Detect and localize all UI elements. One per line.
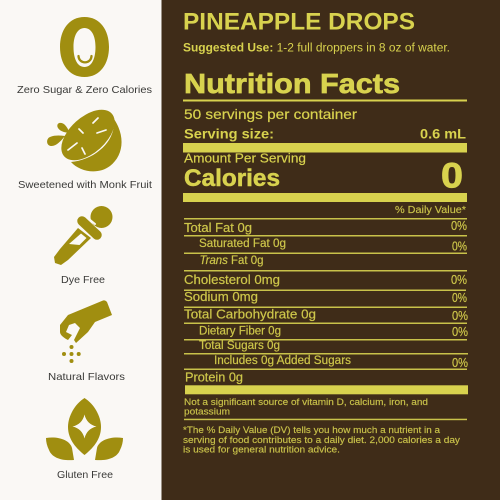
nutrient rows: 0% (451, 273, 467, 287)
nutrient rows: Sodium 0mg (184, 290, 258, 304)
nutrient rows: 0% (451, 219, 467, 233)
icon: zero with smile (60, 17, 109, 77)
title: PINEAPPLE DROPS (183, 8, 415, 36)
daily value footnote: *The % Daily Value (DV) tells you how much a nutrient in a (183, 425, 440, 435)
nutrient rows: 0% (452, 240, 467, 254)
daily value footnote: serving of food contributes to a daily diet. 2,000 calories a day (183, 435, 461, 445)
nutrient rows: Total Carbohydrate 0g (184, 308, 316, 322)
label: gluten free: Gluten Free (57, 469, 113, 481)
nutrient rows: Cholesterol 0mg (184, 273, 280, 287)
heading: nutrition facts: Nutrition Facts (184, 68, 400, 99)
label: dye free: Dye Free (61, 274, 105, 286)
nutrient rows: Dietary Fiber 0g (199, 326, 281, 338)
daily value footnote: is used for general nutrition advice. (183, 445, 340, 455)
nutrient rows: 0% (452, 356, 468, 370)
suggested use: Suggested Use: 1-2 full droppers in 8 oz of water. (183, 42, 450, 54)
serving size (184, 127, 466, 142)
calories (184, 156, 463, 196)
vitamin note (184, 397, 428, 417)
amount per serving: Amount Per Serving (184, 152, 306, 166)
nutrient rows: 0% (452, 309, 468, 323)
icon: leaves with sparkle (46, 398, 123, 460)
vitamin note: potassium (184, 407, 230, 417)
label: natural flavors: Natural Flavors (48, 371, 125, 383)
calories: 0 (441, 156, 463, 196)
nutrient rows: Protein 0g (185, 371, 243, 385)
panel: benefits column (0, 0, 162, 500)
nutrient rows: Trans Fat 0g (200, 255, 264, 267)
nutrient rows: Saturated Fat 0g (199, 238, 286, 250)
nutrient rows: 0% (452, 291, 467, 305)
panel: nutrition table (183, 100, 468, 455)
vitamin note: Not a significant source of vitamin D, calcium, iron, and (184, 397, 428, 407)
icon: halved fruit (47, 100, 124, 171)
serving size: 0.6 mL (420, 127, 466, 142)
servings per container: 50 servings per container (184, 106, 357, 122)
label: monk fruit: Sweetened with Monk Fruit (18, 179, 152, 191)
label: zero sugar: Zero Sugar & Zero Calories (17, 84, 152, 96)
nutrient rows: 0% (452, 325, 468, 339)
calories: Calories (184, 165, 280, 192)
icon: pinching hand (60, 300, 112, 363)
daily value footnote (183, 425, 461, 455)
icon: dropper (54, 206, 112, 265)
nutrient rows: Total Sugars 0g (199, 340, 280, 352)
daily value heading: % Daily Value* (395, 205, 466, 216)
nutrient rows (184, 219, 468, 385)
serving size: Serving size: (184, 127, 274, 142)
nutrient rows: Total Fat 0g (184, 221, 252, 235)
nutrient rows: Includes 0g Added Sugars (214, 355, 351, 367)
rules and bars (183, 100, 468, 420)
